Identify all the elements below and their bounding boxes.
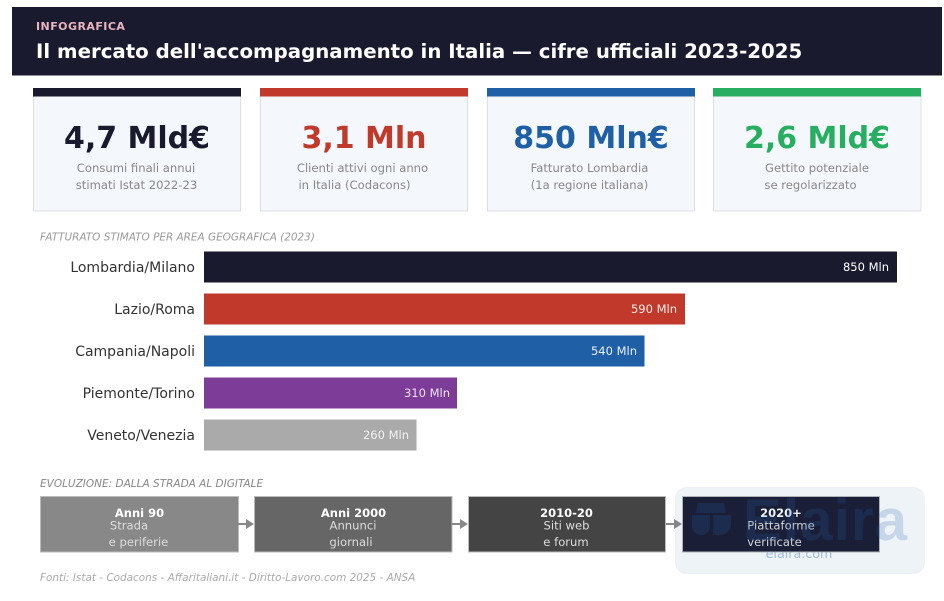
panel: KPI gettito: 2,6 Mld€: [744, 121, 890, 156]
bar: Veneto: Veneto/Venezia: [87, 428, 195, 444]
panel: KPI gettito: se regolarizzato: [764, 178, 857, 192]
panel: KPI Lombardia: Fatturato Lombardia: [531, 161, 648, 175]
panel: KPI clienti: Clienti attivi ogni anno: [297, 161, 428, 175]
title: Il mercato dell'accompagnamento in Italia — cifre ufficiali 2023-2025: [36, 40, 802, 63]
panel: KPI gettito: [713, 88, 921, 211]
step: Anni 90: Anni 90: [115, 506, 164, 520]
panel: KPI clienti: [260, 88, 468, 211]
step: 2010-20: 2010-20: [540, 506, 593, 520]
arrow: [666, 519, 682, 529]
watermark: Elaira logo: [676, 488, 924, 574]
heading: timeline: EVOLUZIONE: DALLA STRADA AL DIGITALE: [40, 478, 263, 490]
panel: KPI clienti: 3,1 Mln: [301, 121, 427, 156]
panel: KPI clienti: in Italia (Codacons): [298, 178, 411, 192]
bar: Lazio: 590 Mln: [631, 302, 677, 316]
bar: Campania: 540 Mln: [591, 344, 637, 358]
icon: logo mark: [692, 503, 731, 535]
arrow: [452, 519, 468, 529]
step: 2020+: [682, 496, 880, 552]
heading: bar chart: FATTURATO STIMATO PER AREA GEOGRAFICA (2023): [40, 232, 315, 244]
step: Anni 90: e periferie: [109, 535, 168, 549]
logo url: elaira.com: [766, 546, 832, 561]
bar: Campania: Campania/Napoli: [75, 344, 195, 360]
bar: Lombardia: [70, 252, 897, 282]
bar: Piemonte: [83, 378, 457, 408]
step: 2010-20: [468, 496, 666, 552]
step: 2010-20: Siti web: [543, 518, 590, 532]
bar: Lazio: [114, 294, 685, 324]
step: 2020+: 2020+: [760, 506, 802, 520]
eyebrow label: INFOGRAFICA: [36, 20, 125, 33]
bar: Piemonte: Piemonte/Torino: [83, 386, 195, 402]
bar: Veneto: [87, 420, 416, 450]
step: Anni 90: [40, 496, 238, 552]
bar: Lazio: Lazio/Roma: [114, 302, 195, 318]
bar: Lombardia: Lombardia/Milano: [70, 260, 195, 276]
logo wordmark: Elaira: [743, 488, 908, 553]
bar: Piemonte: 310 Mln: [404, 386, 450, 400]
header banner: [12, 7, 942, 76]
step: 2020+: verificate: [747, 535, 802, 549]
panel: KPI consumi: stimati Istat 2022-23: [76, 178, 197, 192]
panel: KPI Lombardia: [487, 88, 695, 211]
bar: Campania: [75, 336, 644, 366]
panel: KPI consumi: Consumi finali annui: [77, 161, 195, 175]
timeline: [40, 496, 880, 552]
step: 2010-20: e forum: [543, 535, 589, 549]
panel: KPI Lombardia: 850 Mln€: [513, 121, 669, 156]
step: Anni 2000: Anni 2000: [321, 506, 386, 520]
footer sources: Fonti: Istat - Codacons - Affaritaliani.it - Diritto-Lavoro.com 2025 - ANSA: [40, 572, 415, 584]
arrow: [238, 519, 254, 529]
step: Anni 2000: giornali: [329, 535, 373, 549]
panel: KPI Lombardia: (1a regione italiana): [531, 178, 648, 192]
step: Anni 90: Strada: [110, 518, 148, 532]
bar: Veneto: 260 Mln: [363, 428, 409, 442]
bar: Lombardia: 850 Mln: [843, 260, 889, 274]
panel: KPI consumi: [33, 88, 241, 211]
step: Anni 2000: [254, 496, 452, 552]
panel: KPI consumi: 4,7 Mld€: [64, 121, 210, 156]
bar chart: [70, 252, 897, 450]
step: 2020+: Piattaforme: [747, 518, 815, 532]
panel: KPI gettito: Gettito potenziale: [765, 161, 869, 175]
step: Anni 2000: Annunci: [330, 518, 376, 532]
